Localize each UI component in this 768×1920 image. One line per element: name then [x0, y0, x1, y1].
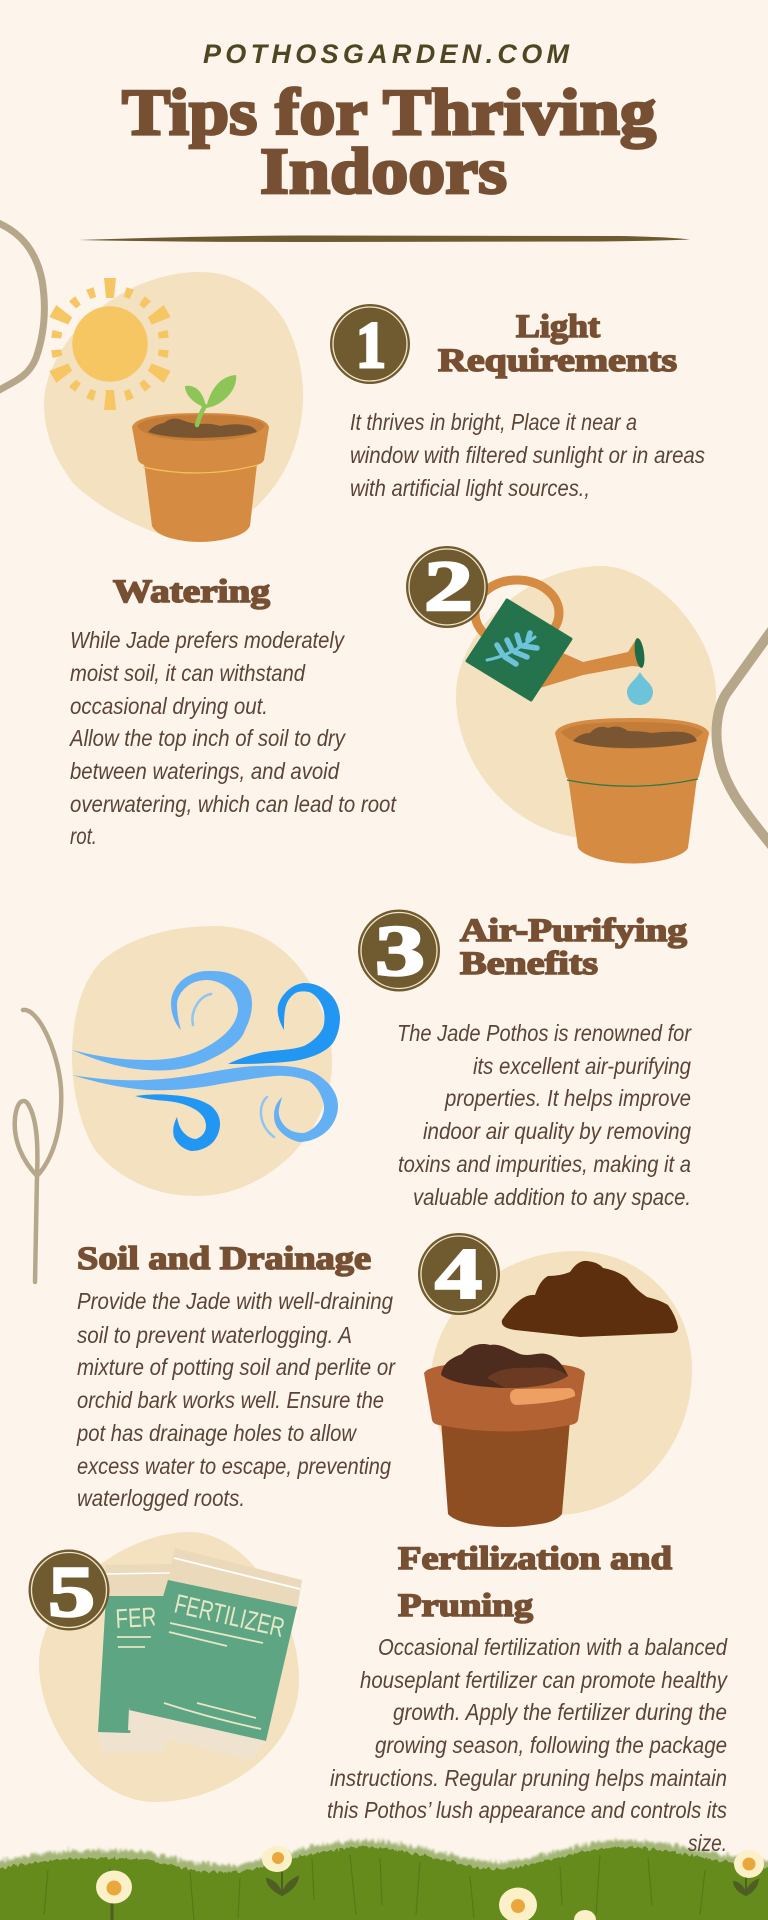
decorative curve left top	[0, 222, 44, 392]
heading: air purifying benefits: Air-Purifying	[460, 913, 688, 949]
number badge 1	[330, 304, 410, 384]
blob 2	[456, 566, 716, 838]
icon: water drop	[627, 672, 653, 705]
flower 1	[96, 1870, 132, 1920]
text: fertilization: Occasional fertilization with a balanced	[378, 1634, 728, 1660]
blob 5	[39, 1532, 299, 1802]
blob 1	[44, 272, 303, 542]
title: Indoors	[260, 135, 507, 208]
icon: potted seedling	[132, 375, 269, 542]
title: Tips for Thriving	[122, 76, 656, 149]
text: soil and drainage: pot has drainage holes to allow	[76, 1420, 357, 1446]
text: soil and drainage: mixture of potting soil and perlite or	[77, 1354, 396, 1380]
text: watering	[68, 627, 397, 849]
text: soil and drainage: orchid bark works well. Ensure the	[77, 1387, 384, 1413]
site name: POTHOSGARDEN.COM	[203, 39, 570, 69]
text: watering: While Jade prefers moderately	[70, 627, 345, 653]
text: air purifying: valuable addition to any space.	[413, 1184, 691, 1210]
text: light requirements	[350, 409, 705, 501]
back bag	[98, 1564, 172, 1752]
section 5: fertilization	[30, 1532, 672, 1802]
heading: fertilization and pruning: Fertilization and	[398, 1541, 672, 1577]
heading: soil and drainage: Soil and Drainage	[77, 1241, 371, 1277]
text: watering: moist soil, it can withstand	[70, 660, 306, 686]
decorative curve right	[717, 630, 768, 846]
text: watering: Allow the top inch of soil to dry	[68, 725, 346, 751]
flower 5	[734, 1850, 764, 1895]
heading: light requirements: Requirements	[438, 343, 677, 379]
flower 3	[499, 1888, 537, 1920]
section 4: soil and drainage	[76, 1233, 692, 1527]
text: watering: between waterings, and avoid	[70, 758, 340, 784]
text: soil and drainage	[76, 1288, 396, 1511]
heading: fertilization and pruning	[398, 1541, 672, 1624]
number badge 3	[358, 910, 440, 992]
section 2: watering	[68, 546, 768, 864]
blob 4	[431, 1251, 692, 1515]
title	[122, 76, 656, 208]
icon: soil-filled pot	[424, 1344, 585, 1527]
flower 4	[574, 1910, 596, 1920]
text: soil and drainage: excess water to escape, preventing	[77, 1453, 391, 1479]
text: watering: overwatering, which can lead to root	[70, 791, 397, 817]
text: fertilization: instructions. Regular pruning helps maintain	[330, 1765, 727, 1791]
icon: sun	[49, 278, 171, 410]
back bag: FER	[115, 1602, 157, 1634]
section 1: light requirements	[44, 272, 705, 542]
icon: wind	[72, 971, 340, 1151]
front bag	[128, 1548, 302, 1760]
number badge 5	[30, 1552, 108, 1632]
text: fertilization: houseplant fertilizer can promote healthy	[360, 1667, 728, 1693]
heading: air purifying benefits: Benefits	[460, 946, 598, 982]
text: air purifying: properties. It helps improve	[444, 1085, 691, 1111]
decorative loop left	[15, 1010, 61, 1282]
text: fertilization: growth. Apply the fertilizer during the	[393, 1699, 727, 1725]
number badge 4: 4	[435, 1234, 482, 1314]
grass band	[0, 1847, 768, 1920]
text: air purifying: indoor air quality by removing	[423, 1118, 691, 1144]
text: air purifying: toxins and impurities, making it a	[398, 1151, 691, 1177]
number badge 3: 3	[375, 911, 425, 991]
text: light requirements: It thrives in bright, Place it near a	[350, 409, 637, 435]
grass fuzzy top	[0, 1840, 768, 1920]
text: air purifying: The Jade Pothos is renowned for	[397, 1020, 692, 1046]
text: air purifying	[397, 1020, 692, 1210]
blob 3	[72, 926, 332, 1196]
icon: soil pile	[502, 1261, 678, 1337]
brush divider	[78, 236, 690, 242]
number badge 1: 1	[356, 309, 386, 382]
number badge 2	[406, 546, 488, 628]
flower 2	[262, 1846, 298, 1895]
text: soil and drainage: Provide the Jade with well-draining	[77, 1288, 393, 1314]
icon: fertilizer bags	[98, 1548, 302, 1760]
text: fertilization: growing season, following the package	[375, 1732, 727, 1758]
number badge 2: 2	[424, 546, 473, 626]
section 3: air purifying	[15, 910, 692, 1282]
number badge 5: 5	[48, 1552, 95, 1632]
text: watering: rot.	[70, 823, 97, 849]
text: watering: occasional drying out.	[70, 693, 268, 719]
heading: light requirements: Light	[516, 309, 600, 345]
heading: watering: Watering	[113, 574, 271, 610]
grass blades	[44, 1855, 705, 1920]
text: light requirements: window with filtered sunlight or in areas	[350, 442, 705, 468]
text: fertilization: size.	[688, 1830, 727, 1856]
icon: watering can	[467, 580, 646, 700]
text: air purifying: its excellent air-purifying	[473, 1053, 691, 1079]
heading: light requirements	[438, 309, 677, 379]
grass footer	[0, 1840, 768, 1920]
icon: clay pot	[555, 718, 709, 864]
text: fertilization	[327, 1634, 728, 1856]
text: soil and drainage: waterlogged roots.	[77, 1485, 245, 1511]
heading: air purifying benefits	[460, 913, 688, 982]
number badge 4	[418, 1233, 500, 1315]
heading: fertilization and pruning: Pruning	[398, 1588, 534, 1624]
text: light requirements: with artificial light sources.,	[350, 475, 590, 501]
text: soil and drainage: soil to prevent waterlogging. A	[77, 1322, 352, 1348]
front bag: FERTILIZER	[172, 1589, 288, 1643]
